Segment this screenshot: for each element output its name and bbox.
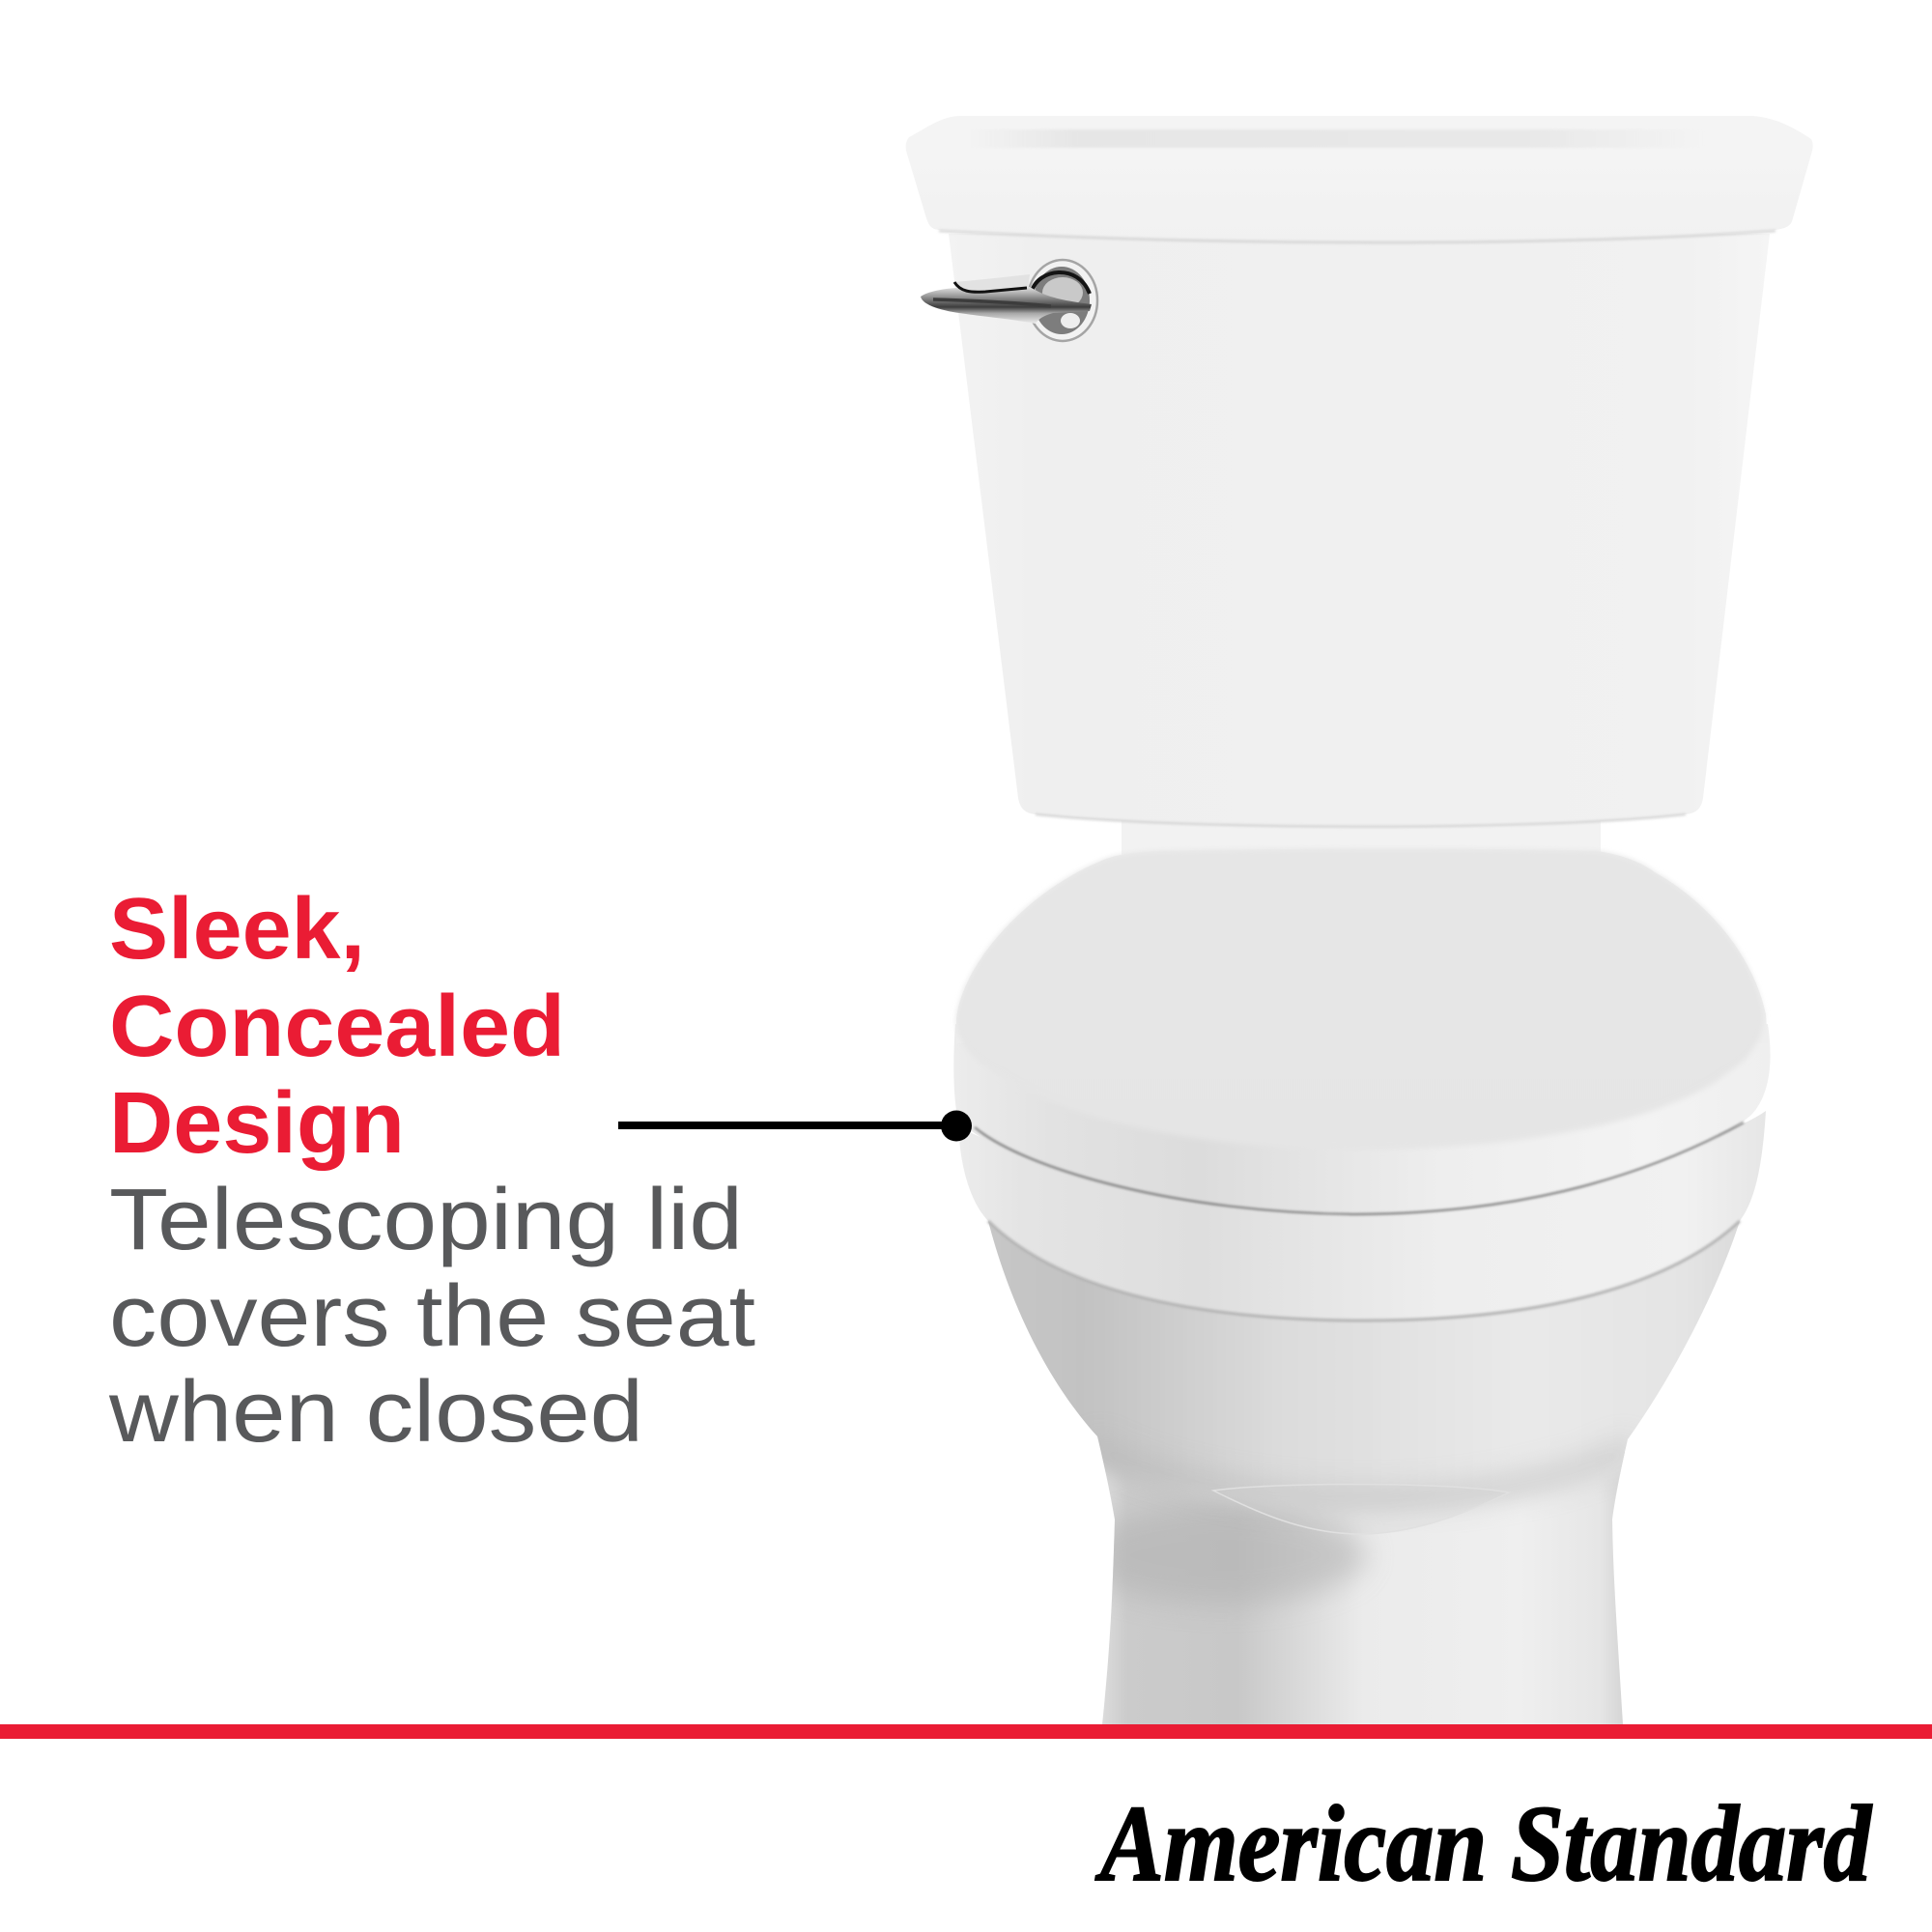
heading: feature title bbox=[109, 881, 565, 1172]
description text: Telescoping lid bbox=[109, 1172, 743, 1268]
toilet pedestal and bowl body bbox=[988, 1221, 1740, 1724]
description text bbox=[108, 1172, 755, 1461]
heading: feature title: Concealed bbox=[109, 979, 565, 1075]
toilet illustration bbox=[906, 116, 1813, 1729]
flush handle bbox=[921, 260, 1097, 341]
closed lid outline top bbox=[956, 849, 1768, 1043]
bowl rim bbox=[958, 1111, 1766, 1321]
tank body bbox=[949, 234, 1770, 827]
closed lid side skirt bbox=[953, 1024, 1771, 1214]
heading: feature title: Sleek, bbox=[109, 881, 365, 978]
closed lid top bbox=[956, 849, 1764, 1150]
tank neck bbox=[1122, 816, 1601, 869]
red divider bar bbox=[0, 1724, 1932, 1739]
tank lid bbox=[906, 116, 1813, 242]
description text: when closed bbox=[108, 1364, 643, 1461]
callout pointer bbox=[618, 1111, 972, 1142]
heading: feature title: Design bbox=[109, 1075, 405, 1172]
description text: covers the seat bbox=[109, 1268, 755, 1365]
